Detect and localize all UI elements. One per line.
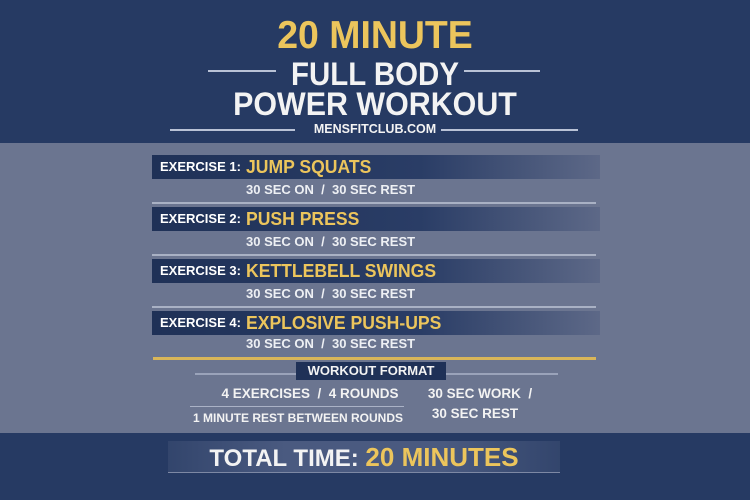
exercise 3: 30 SEC ON / 30 SEC REST bbox=[246, 286, 415, 301]
workout format section bbox=[190, 362, 558, 425]
title line 2: FULL BODY bbox=[291, 56, 459, 92]
workout format section: 30 SEC REST bbox=[432, 406, 518, 421]
exercise 4: 30 SEC ON / 30 SEC REST bbox=[246, 336, 415, 351]
exercise 1: JUMP SQUATS bbox=[246, 156, 371, 177]
workout format section: 1 MINUTE REST BETWEEN ROUNDS bbox=[193, 411, 403, 425]
title line 1: 20 MINUTE bbox=[277, 14, 473, 57]
total time bar: TOTAL TIME: 20 MINUTES bbox=[209, 442, 519, 472]
format heading: WORKOUT FORMAT bbox=[308, 363, 434, 378]
header band bbox=[0, 0, 750, 143]
title line 3: POWER WORKOUT bbox=[233, 86, 517, 122]
footer band bbox=[0, 433, 750, 500]
exercise 1: 30 SEC ON / 30 SEC REST bbox=[246, 182, 415, 197]
format text left: 4 EXERCISES / 4 ROUNDS bbox=[221, 386, 399, 401]
exercise 2 bbox=[152, 207, 600, 256]
exercise 1 bbox=[152, 155, 600, 204]
exercise 3: KETTLEBELL SWINGS bbox=[246, 260, 436, 281]
format text right: 30 SEC WORK / bbox=[428, 386, 532, 401]
exercise 4: EXERCISE 4: bbox=[160, 315, 241, 330]
site url: MENSFITCLUB.COM bbox=[314, 122, 436, 136]
exercise 3: EXERCISE 3: bbox=[160, 263, 241, 278]
exercise 2: EXERCISE 2: bbox=[160, 211, 241, 226]
exercise 2: PUSH PRESS bbox=[246, 208, 359, 229]
exercise 2: 30 SEC ON / 30 SEC REST bbox=[246, 234, 415, 249]
exercise 1: EXERCISE 1: bbox=[160, 159, 241, 174]
exercise 4 bbox=[152, 311, 600, 351]
exercise 4: EXPLOSIVE PUSH-UPS bbox=[246, 312, 441, 333]
exercise 3 bbox=[152, 259, 600, 308]
